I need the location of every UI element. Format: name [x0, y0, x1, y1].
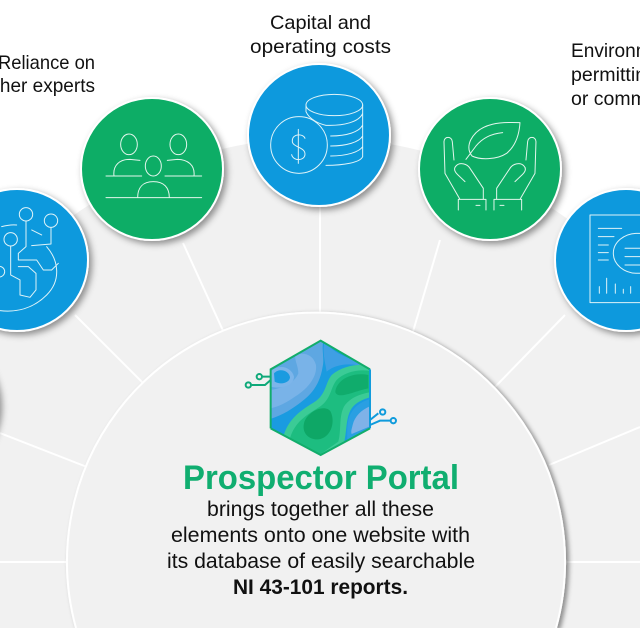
label: capital and operating costs [250, 12, 391, 58]
description: brings together all these [207, 498, 434, 521]
description: elements onto one website with [171, 524, 470, 547]
icon: people at table [106, 134, 202, 198]
label: environmental permitting [571, 40, 640, 110]
circle: globe technology [0, 189, 88, 331]
label: reliance on other experts [0, 52, 95, 97]
icon: hands holding leaf [444, 122, 536, 210]
label: capital and operating costs: Capital and [270, 12, 371, 34]
logo: hexagon contour map [246, 337, 396, 460]
description: its database of easily searchable [167, 550, 475, 573]
icon: dollar coins [271, 94, 363, 173]
circle: report [555, 189, 640, 331]
title: Prospector Portal [183, 459, 459, 497]
circle: experts [81, 98, 223, 240]
icon: circuit globe [0, 208, 58, 311]
description: NI 43-101 reports. [233, 576, 408, 599]
central circle [67, 313, 565, 628]
label: capital and operating costs: operating costs [250, 36, 391, 58]
icon: circuit traces right [370, 409, 396, 425]
icon: circuit traces left [246, 374, 271, 388]
circle: capital costs [248, 64, 390, 206]
outer grey wheel [0, 138, 640, 628]
icon: report document [590, 215, 640, 303]
label: reliance on other experts: Reliance on [0, 52, 95, 74]
circle: environment [419, 98, 561, 240]
description [167, 498, 475, 599]
